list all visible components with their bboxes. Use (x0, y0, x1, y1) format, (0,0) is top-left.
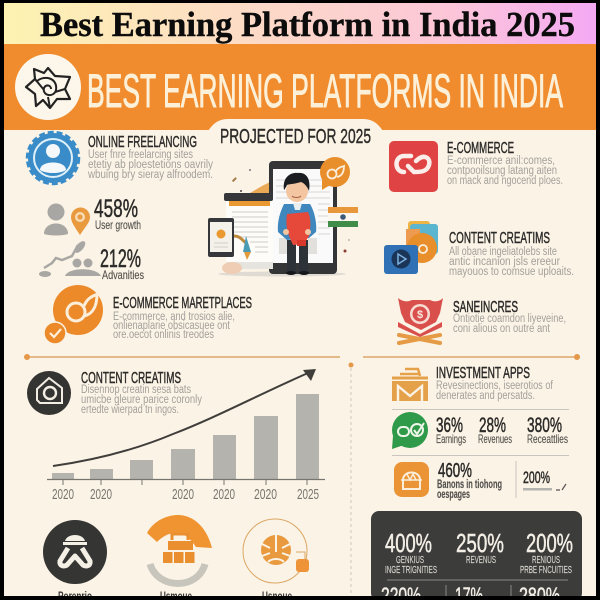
stats row: banons: oespages (437, 487, 470, 501)
panel: dark stats: INGE TRIGNITIES (385, 564, 437, 576)
panel: e-commerce: E-commerce anil:comes, (447, 155, 555, 167)
stats row: banons (394, 460, 566, 501)
panel: content creatims chart: umicbe gleure parice coronly (81, 394, 202, 406)
panel: e-commerce: contpooilsung latang aiten (447, 165, 557, 177)
panel: content creatims chart: CONTENT CREATIMS (81, 370, 181, 387)
panel: dark stats: GENKIUS (396, 554, 424, 566)
panel: content creatims right (384, 221, 574, 278)
panel: investment apps: denerates and persatds. (436, 390, 535, 402)
logo (15, 54, 81, 120)
panel: dark stats (371, 511, 582, 600)
bar chart (47, 394, 325, 503)
panel: e-commerce: E-COMMERCE (447, 140, 514, 157)
bar chart: 2020 (254, 486, 277, 503)
panel: e-commerce (389, 140, 563, 192)
stats row: earnings: Receattlies (527, 432, 568, 446)
panel: content creatims chart: ertedte wierpad tn ingos. (81, 404, 179, 416)
panel: investment apps: INVESTMENT APPS (436, 365, 530, 382)
chat bubble (320, 157, 350, 190)
panel: e-commerce marketplaces: ore.oecot onlinis treodes (113, 329, 214, 341)
icon: trend and people (39, 239, 101, 277)
stats row: earnings: Revenues (478, 432, 512, 446)
phone (208, 218, 234, 257)
panel: saneincres (398, 298, 566, 343)
bar chart: 2025 (297, 486, 319, 503)
stats row: earnings: Earnings (436, 432, 466, 446)
icon: red link (389, 141, 438, 192)
panel: content creatims right: All obane ingeliatolebs site (449, 246, 557, 258)
icon: orange swirl (44, 285, 103, 344)
panel: e-commerce marketplaces: onlienaplarie obsicasuee ont (113, 320, 231, 332)
panel: investment apps: Revesinections, iseerotios of (436, 380, 554, 392)
panel: online freelancing: ONLINE FREELANCING (88, 134, 197, 151)
icon: layered media (384, 221, 438, 274)
panel: dark stats: 250% (456, 528, 504, 558)
subtitle pill (208, 119, 383, 148)
panel: dark stats: 200% (526, 528, 573, 558)
panel: investment apps (392, 365, 554, 402)
panel: saneincres: coni alious on outre ant (453, 323, 551, 335)
panel: content creatims chart: Disennop creatin sesa bats (81, 384, 191, 396)
icon group: outlined circle (243, 519, 309, 600)
panel: e-commerce: on mack and ngocend ploes. (447, 175, 563, 187)
icon: dark camera badge (27, 371, 71, 415)
panel: dark stats: 400% (385, 528, 432, 558)
icon: person and pin (44, 204, 90, 236)
stat: advanities: 212% (100, 245, 141, 273)
icon: green chat (392, 412, 428, 449)
panel: dark stats: REVENUS (466, 554, 496, 566)
stat: user growth: 458% (94, 195, 138, 223)
icon group: dark badge (43, 520, 107, 600)
title band: Best Earning Platform in India 2025 (40, 5, 575, 44)
header banner (0, 44, 600, 130)
panel: online freelancing: User fnre freelarcing sites (88, 149, 193, 161)
panel: e-commerce marketplaces: E-COMMERCE MARETPLACES (113, 295, 252, 312)
panel: content creatims right: mayouos to comsue uploaits. (449, 266, 574, 278)
icon group: orange arc (147, 515, 212, 600)
bar chart: 2020 (172, 486, 194, 503)
person (278, 173, 316, 275)
panel: saneincres: SANEINCRES (453, 299, 518, 316)
panel: content creatims chart (27, 369, 325, 503)
arrow: growth trend (53, 369, 316, 466)
panel: saneincres: Ontiotie coamdon liyeveine, (453, 313, 566, 325)
bar chart: 2020 (52, 486, 74, 503)
india flag (328, 207, 358, 227)
icon: orange envelope (392, 369, 428, 401)
rocket and blob (222, 236, 251, 274)
stats row: earnings (392, 412, 568, 449)
left tablet (224, 193, 273, 269)
stats row: banons: 200% (523, 468, 550, 487)
icon: user badge (27, 132, 79, 184)
panel: online freelancing: wbuing bry sieray alfroodem. (87, 169, 213, 181)
stat: user growth (44, 195, 141, 236)
panel: content creatims right: antic incanion jsls ereeur (449, 256, 560, 268)
panel: e-commerce marketplaces (44, 285, 252, 344)
back tablet (269, 161, 337, 274)
stats row: banons: 460% (438, 460, 472, 482)
stat: advanities (39, 239, 144, 282)
stats row: earnings: 36% (436, 414, 463, 437)
panel: online freelancing (27, 132, 213, 184)
illustration: person with devices and flag (208, 157, 358, 276)
icon: red shield: $ (417, 309, 423, 321)
panel: dark stats: RENIOUS (532, 554, 560, 566)
icon: red shield (398, 298, 443, 343)
panel: e-commerce marketplaces: E-commerce, and trosios alie, (113, 311, 235, 323)
bar chart: 2020 (90, 486, 112, 503)
stat: user growth: User growth (95, 218, 141, 232)
stats row: banons: Banons in tiohong (437, 477, 502, 491)
bar chart: 2020 (213, 486, 235, 503)
icon: orange basket (394, 462, 429, 497)
stats row: earnings: 380% (527, 414, 562, 437)
panel: online freelancing: etetiy ab ploestetions oavrily (88, 159, 213, 171)
stats row: earnings: 28% (479, 414, 506, 437)
stat: advanities: Advanities (102, 268, 144, 282)
subtitle pill: PROJECTED FOR 2025 (220, 126, 371, 148)
